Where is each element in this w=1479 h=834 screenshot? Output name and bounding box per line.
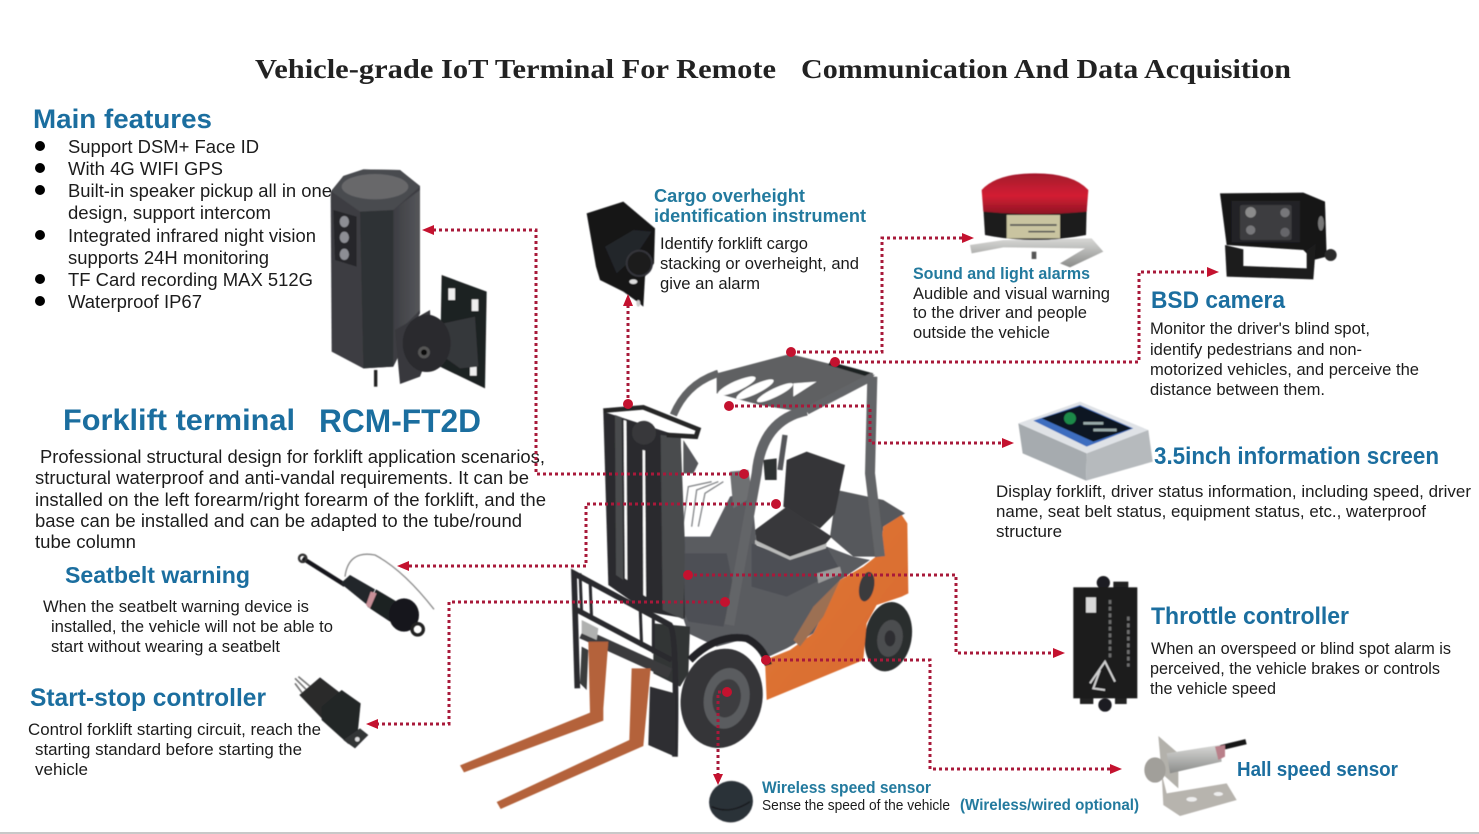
panel: forklift terminal description: tube column <box>35 532 136 552</box>
connector: seatbelt warning <box>408 504 776 566</box>
forklift illustration <box>460 354 917 826</box>
panel: main features: design, support intercom <box>68 203 271 223</box>
panel: wireless speed sensor <box>762 779 1139 814</box>
panel: BSD camera: identify pedestrians and non- <box>1150 341 1362 359</box>
panel: forklift terminal description <box>35 403 546 552</box>
panel: start-stop controller: Control forklift starting circuit, reach the <box>28 721 321 739</box>
panel: BSD camera <box>1150 287 1419 399</box>
panel: BSD camera: Monitor the driver's blind spot, <box>1150 320 1370 338</box>
connector: BSD camera <box>835 272 1210 362</box>
levers <box>683 482 723 527</box>
front wheel <box>671 641 772 756</box>
connector: wireless speed sensor <box>718 692 727 775</box>
panel: forklift terminal description: installed on the left forearm/right forearm of the forklift, and the <box>35 490 546 510</box>
panel: main features: With 4G WIFI GPS <box>68 159 223 179</box>
panel: information screen: name, seat belt status, equipment status, etc., waterproof <box>996 503 1426 521</box>
engine hood and cowl <box>682 490 870 658</box>
panel: seatbelt warning: installed, the vehicle will not be able to <box>51 618 333 636</box>
panel: BSD camera: motorized vehicles, and perceive the <box>1150 361 1419 379</box>
title: Communication And Data Acquisition <box>801 54 1291 84</box>
panel: sound and light alarms: outside the vehicle <box>913 324 1050 342</box>
fork carriage guard <box>574 573 676 757</box>
panel: seatbelt warning: Seatbelt warning <box>65 562 250 588</box>
canopy <box>673 354 880 625</box>
panel: information screen: 3.5inch information screen <box>1154 443 1439 470</box>
rear wheel <box>859 598 917 675</box>
panel: start-stop controller: starting standard before starting the <box>35 741 302 759</box>
panel: start-stop controller <box>28 684 321 779</box>
connector: forklift terminal <box>432 230 744 474</box>
panel: throttle controller <box>1150 603 1451 698</box>
connector: information screen <box>729 406 1005 443</box>
connector: hall speed sensor <box>766 660 1113 769</box>
panel: seatbelt warning: start without wearing a seatbelt <box>51 638 280 656</box>
heading: Hall speed sensor: Hall speed sensor <box>1237 759 1398 781</box>
device: hall speed sensor <box>1144 736 1246 816</box>
device: sound and light alarm <box>970 173 1103 267</box>
connector: throttle controller <box>688 575 1057 653</box>
panel: throttle controller: perceived, the vehicle brakes or controls <box>1150 660 1440 678</box>
arrowheads and anchor dots <box>366 225 1219 785</box>
device: forklift terminal <box>331 169 487 388</box>
panel: cargo overheight <box>654 186 866 293</box>
panel: start-stop controller: Start-stop controller <box>30 684 266 712</box>
panel: BSD camera: BSD camera <box>1151 287 1286 314</box>
panel: forklift terminal description: base can be installed and can be adapted to the tube/round <box>35 511 522 531</box>
device: throttle controller <box>1073 576 1137 712</box>
device: BSD camera <box>1220 193 1337 279</box>
panel: cargo overheight: stacking or overheight, and <box>660 255 859 273</box>
panel: forklift terminal description: RCM-FT2D <box>319 403 481 439</box>
panel: wireless speed sensor: Wireless speed sensor <box>762 779 932 797</box>
steering column <box>730 470 753 508</box>
connector: sound and light alarm <box>791 238 965 352</box>
panel: throttle controller: When an overspeed or blind spot alarm is <box>1151 640 1451 658</box>
panel: forklift terminal description: Professional structural design for forklift application scenarios, <box>40 447 545 467</box>
panel: throttle controller: the vehicle speed <box>1150 680 1276 698</box>
wireless speed sensor puck <box>705 777 757 826</box>
panel: cargo overheight: Identify forklift cargo <box>660 235 808 253</box>
panel: cargo overheight: Cargo overheight <box>654 186 805 206</box>
panel: throttle controller: Throttle controller <box>1151 603 1349 630</box>
device: 3.5 inch information screen <box>1018 402 1153 481</box>
panel: forklift terminal description: structural waterproof and anti-vandal requirements. It can be <box>35 468 529 488</box>
device: seatbelt switch <box>299 554 434 635</box>
connector: cargo overheight <box>626 304 630 404</box>
mast <box>603 407 698 619</box>
panel: forklift terminal description: Forklift terminal <box>63 404 295 437</box>
panel: seatbelt warning: When the seatbelt warning device is <box>43 598 309 616</box>
rear deck <box>830 490 905 557</box>
panel: sound and light alarms <box>913 265 1110 342</box>
panel: wireless speed sensor: (Wireless/wired optional) <box>960 797 1139 814</box>
device: start-stop relay <box>295 677 368 748</box>
panel: information screen: Display forklift, driver status information, including speed, driver <box>996 483 1472 501</box>
panel: sound and light alarms: to the driver and people <box>913 304 1087 322</box>
panel: main features: supports 24H monitoring <box>68 248 269 268</box>
panel: sound and light alarms: Audible and visual warning <box>913 285 1110 303</box>
panel: main features <box>33 104 332 312</box>
panel: main features: Built-in speaker pickup all in one <box>68 181 332 201</box>
connector: start-stop controller <box>376 602 725 724</box>
title: Vehicle-grade IoT Terminal For Remote <box>255 54 776 84</box>
panel: main features: Main features <box>33 104 212 134</box>
panel: main features: Waterproof IP67 <box>68 292 202 312</box>
panel: seatbelt warning <box>43 562 333 656</box>
orange rear body <box>765 515 908 700</box>
panel: cargo overheight: identification instrument <box>654 206 866 226</box>
seat <box>755 452 845 560</box>
panel: wireless speed sensor: Sense the speed of the vehicle <box>762 797 950 814</box>
panel: main features: TF Card recording MAX 512G <box>68 270 313 290</box>
panel: cargo overheight: give an alarm <box>660 275 760 293</box>
lower mast and carriage plate <box>653 623 690 687</box>
device: cargo overheight instrument <box>587 202 655 307</box>
panel: information screen <box>996 443 1472 541</box>
fender <box>690 638 768 665</box>
title <box>255 54 1291 84</box>
panel: sound and light alarms: Sound and light alarms <box>913 265 1090 283</box>
panel: information screen: structure <box>996 523 1062 541</box>
panel: start-stop controller: vehicle <box>35 761 88 779</box>
panel: main features: Integrated infrared night vision <box>68 226 316 246</box>
fork tines <box>460 642 651 809</box>
panel: main features: Support DSM+ Face ID <box>68 137 259 157</box>
panel: BSD camera: distance between them. <box>1150 381 1325 399</box>
